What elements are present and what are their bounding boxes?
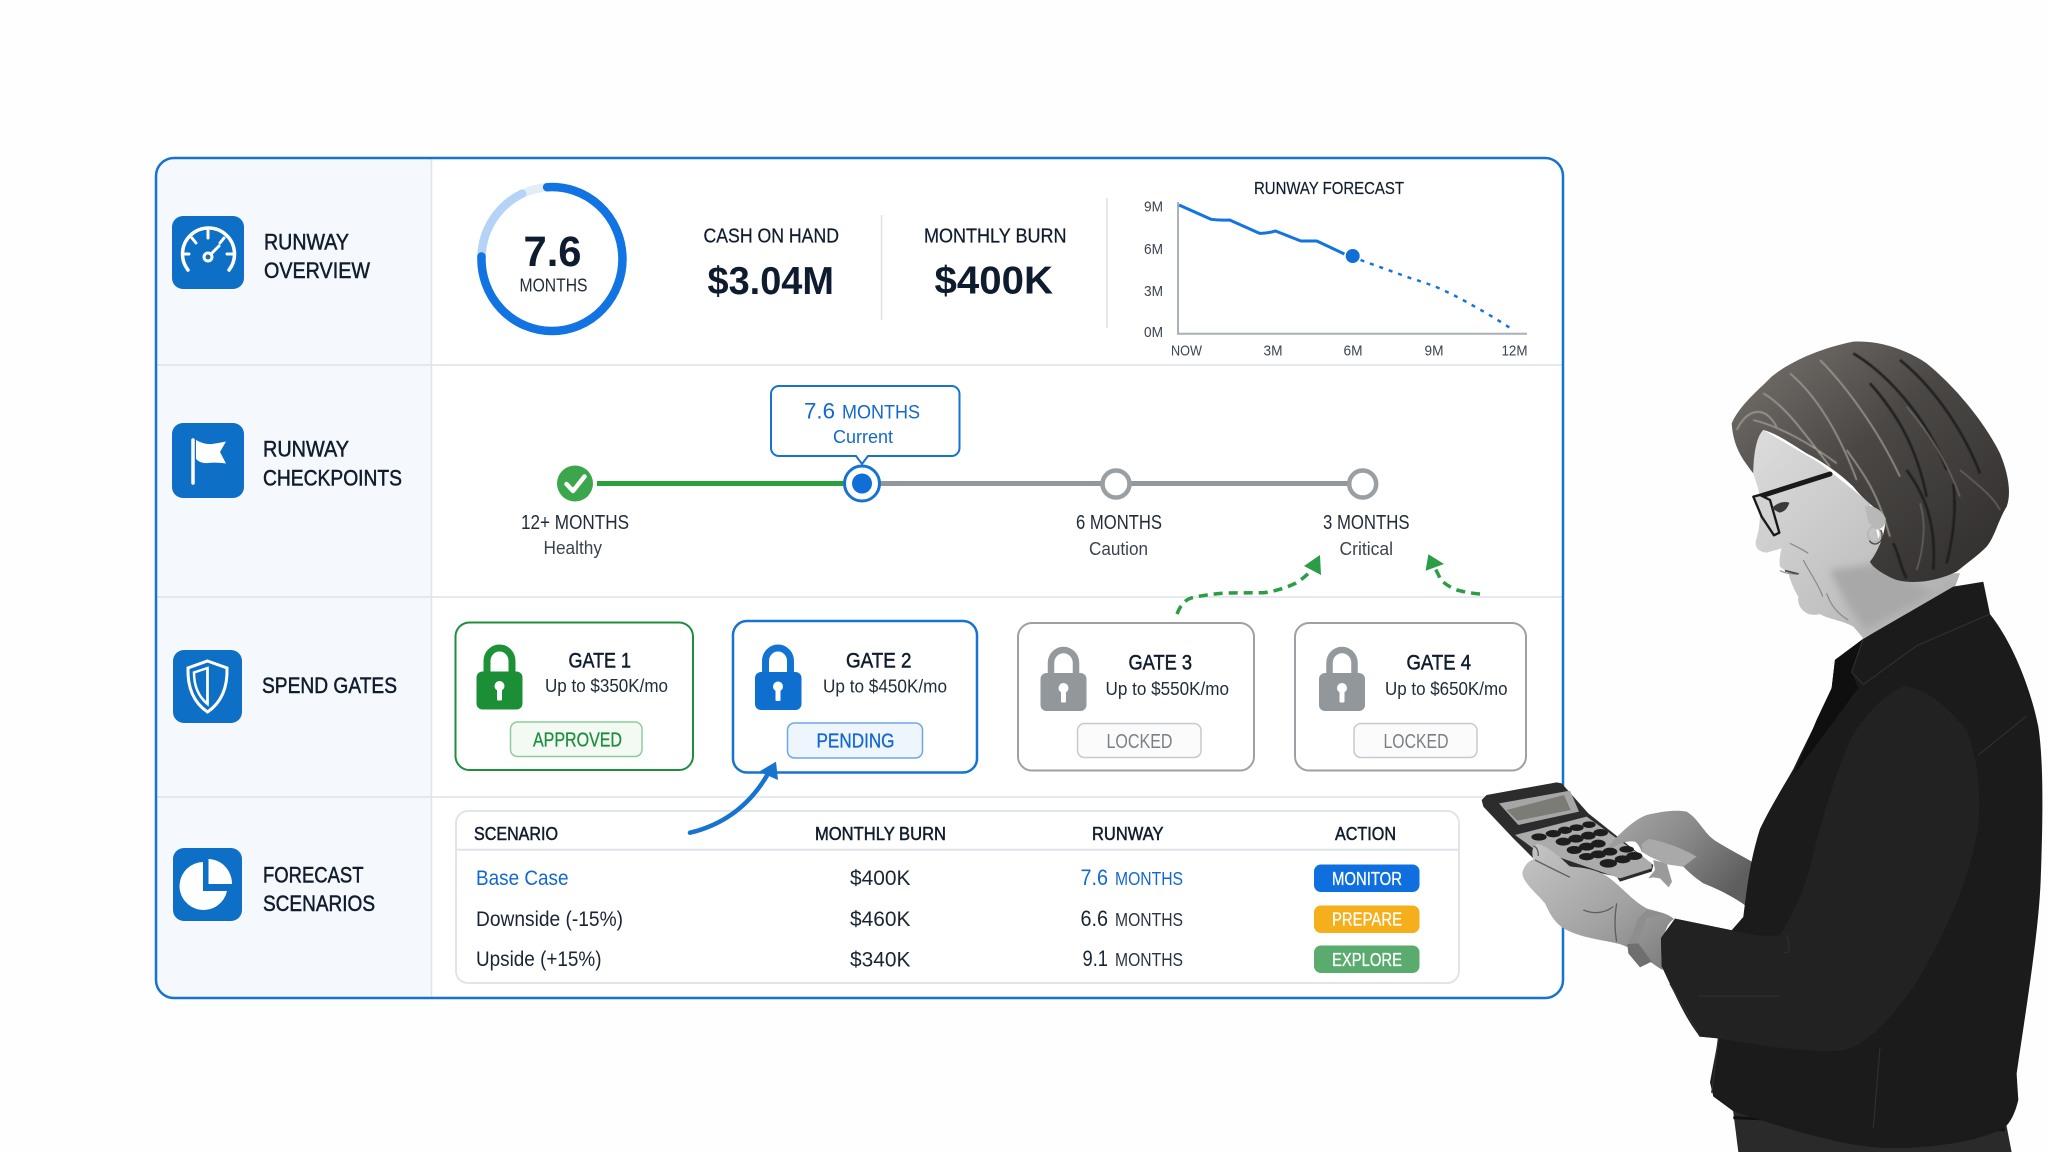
badge: approved xyxy=(510,722,642,756)
table header: ACTION xyxy=(1335,823,1396,844)
sleeve xyxy=(1661,686,1979,1051)
arrow: gate 4 to critical xyxy=(1426,554,1480,594)
line chart: runway forecast: 3M xyxy=(1264,342,1282,360)
milestone: caution: Caution xyxy=(1089,539,1148,559)
icon: lock locked xyxy=(1319,650,1365,711)
table row: upside: 9.1 xyxy=(1082,946,1108,971)
gate 1 card: Up to $350K/mo xyxy=(545,676,668,696)
gauge: 7.6 months: 7.6 xyxy=(524,228,582,276)
heading: runway overview: OVERVIEW xyxy=(264,258,371,283)
table row: base case: $400K xyxy=(850,866,911,890)
row: runway checkpoints label xyxy=(172,423,402,498)
icon: lock pending xyxy=(755,648,802,710)
heading: forecast scenarios: SCENARIOS xyxy=(263,891,375,916)
heading: forecast scenarios: FORECAST xyxy=(263,862,364,888)
icon: flag xyxy=(172,423,244,498)
milestone: healthy: Healthy xyxy=(544,538,602,558)
badge: locked xyxy=(1078,724,1201,758)
gate 3 card xyxy=(1018,623,1254,770)
shirt body xyxy=(1661,582,2042,1148)
badge: locked xyxy=(1354,724,1477,758)
heading: runway checkpoints: CHECKPOINTS xyxy=(263,466,402,490)
line chart: runway forecast: 9M xyxy=(1424,342,1444,360)
table row: base case: MONITOR xyxy=(1332,869,1402,889)
gate 4 card xyxy=(1295,623,1526,770)
black shirt xyxy=(1661,582,2042,1148)
table row: downside xyxy=(476,906,1420,933)
milestone: healthy: 12+ MONTHS xyxy=(521,512,629,534)
milestone: caution xyxy=(1076,470,1162,559)
face shading xyxy=(1780,543,1933,630)
gauge: 7.6 months xyxy=(481,187,622,331)
table row: upside: EXPLORE xyxy=(1332,950,1402,970)
arrow: scenario to gate 2 xyxy=(690,762,778,833)
icon: pie chart xyxy=(173,848,242,921)
glasses xyxy=(1753,474,1830,535)
line chart: runway forecast: 6M xyxy=(1344,342,1362,360)
pants xyxy=(1733,1107,2012,1152)
table row: base case: Base Case xyxy=(476,867,568,890)
table row: downside: MONTHS xyxy=(1115,910,1183,930)
person with calculator xyxy=(1482,341,2042,1152)
stat: cash on hand: CASH ON HAND xyxy=(704,226,839,248)
table row: upside xyxy=(476,946,1420,973)
icon: lock locked xyxy=(1040,650,1086,711)
line chart: runway forecast xyxy=(1144,178,1528,360)
callout: current: MONTHS xyxy=(842,402,920,424)
table row: downside: PREPARE xyxy=(1332,910,1402,930)
hair strands xyxy=(1737,353,2000,578)
gate 2 card: GATE 2 xyxy=(846,650,912,672)
badge: locked: LOCKED xyxy=(1106,731,1172,753)
table row: upside: MONTHS xyxy=(1115,950,1183,970)
row: spend gates label xyxy=(173,650,397,723)
table row: upside: $340K xyxy=(850,948,911,972)
line chart: runway forecast: 0M xyxy=(1144,324,1163,341)
table row: base case: MONTHS xyxy=(1115,869,1183,889)
dashboard panel xyxy=(156,158,1563,998)
line chart: runway forecast: 6M xyxy=(1144,241,1163,258)
milestone: critical: 3 MONTHS xyxy=(1323,512,1410,534)
milestone: caution: 6 MONTHS xyxy=(1076,512,1162,534)
table row: base case xyxy=(476,864,1420,892)
line chart: runway forecast: 9M xyxy=(1144,198,1163,216)
table header: SCENARIO xyxy=(474,823,558,844)
heading: spend gates: SPEND GATES xyxy=(262,673,397,698)
milestone: critical xyxy=(1323,470,1410,559)
milestone: critical: Critical xyxy=(1340,539,1393,559)
calculator xyxy=(1482,782,1653,882)
milestone: current position xyxy=(844,466,880,501)
gate 1 card xyxy=(456,622,693,770)
row: forecast scenarios label xyxy=(173,848,375,921)
face and neck xyxy=(1753,430,1960,638)
stat: monthly burn xyxy=(924,226,1066,302)
gate 3 card: Up to $550K/mo xyxy=(1106,679,1229,699)
line chart: runway forecast: NOW xyxy=(1171,342,1203,360)
icon: speedometer xyxy=(172,216,244,289)
hand: typing xyxy=(1608,811,1752,907)
head xyxy=(1732,341,2009,638)
stat: monthly burn: MONTHLY BURN xyxy=(924,226,1066,248)
placket xyxy=(1793,639,1863,776)
badge: pending: PENDING xyxy=(816,730,894,752)
gate 1 card: GATE 1 xyxy=(568,650,631,672)
icon: shield xyxy=(173,650,242,723)
badge: locked: LOCKED xyxy=(1384,731,1448,753)
timeline xyxy=(521,386,1410,559)
icon: lock approved xyxy=(476,648,522,710)
gate 2 card: Up to $450K/mo xyxy=(823,676,947,696)
calculator and hands xyxy=(1482,782,1752,970)
callout: current xyxy=(771,386,960,464)
heading: runway overview: RUNWAY xyxy=(264,230,349,254)
arrow: gate 3 to critical xyxy=(1177,555,1321,614)
badge: pending xyxy=(788,723,922,758)
badge: approved: APPROVED xyxy=(533,730,622,752)
gate 4 card: Up to $650K/mo xyxy=(1385,679,1508,699)
table: scenarios xyxy=(456,811,1459,983)
milestone: healthy xyxy=(521,466,629,558)
stat: cash on hand: $3.04M xyxy=(708,260,834,303)
stat: monthly burn: $400K xyxy=(934,260,1053,302)
table header: RUNWAY xyxy=(1092,823,1164,844)
table row: base case: 7.6 xyxy=(1080,865,1108,890)
row: runway overview label xyxy=(172,216,371,289)
callout: current: Current xyxy=(833,427,893,447)
hand: holding calculator xyxy=(1522,844,1674,970)
table row: downside: $460K xyxy=(850,907,911,931)
gate 4 card: GATE 4 xyxy=(1406,652,1471,674)
line chart: runway forecast: RUNWAY FORECAST xyxy=(1254,178,1404,198)
table row: downside: Downside (-15%) xyxy=(476,908,623,931)
gate 3 card: GATE 3 xyxy=(1128,652,1192,674)
line chart: runway forecast: 12M xyxy=(1502,342,1528,360)
shirt seams xyxy=(1670,614,2027,1128)
hair xyxy=(1732,341,2009,582)
stat: cash on hand xyxy=(704,226,839,303)
gate 2 card xyxy=(733,621,977,772)
table header xyxy=(474,823,1396,844)
ear and earring xyxy=(1865,506,1886,544)
gauge: 7.6 months: MONTHS xyxy=(520,276,588,296)
heading: runway checkpoints: RUNWAY xyxy=(263,436,349,462)
table header: MONTHLY BURN xyxy=(815,823,946,844)
line chart: runway forecast: 3M xyxy=(1144,283,1163,300)
callout: current: 7.6 xyxy=(804,398,835,424)
wristwatch xyxy=(1627,910,1665,967)
hand detail xyxy=(1533,846,1617,942)
table row: downside: 6.6 xyxy=(1080,906,1108,931)
table row: upside: Upside (+15%) xyxy=(476,948,602,971)
